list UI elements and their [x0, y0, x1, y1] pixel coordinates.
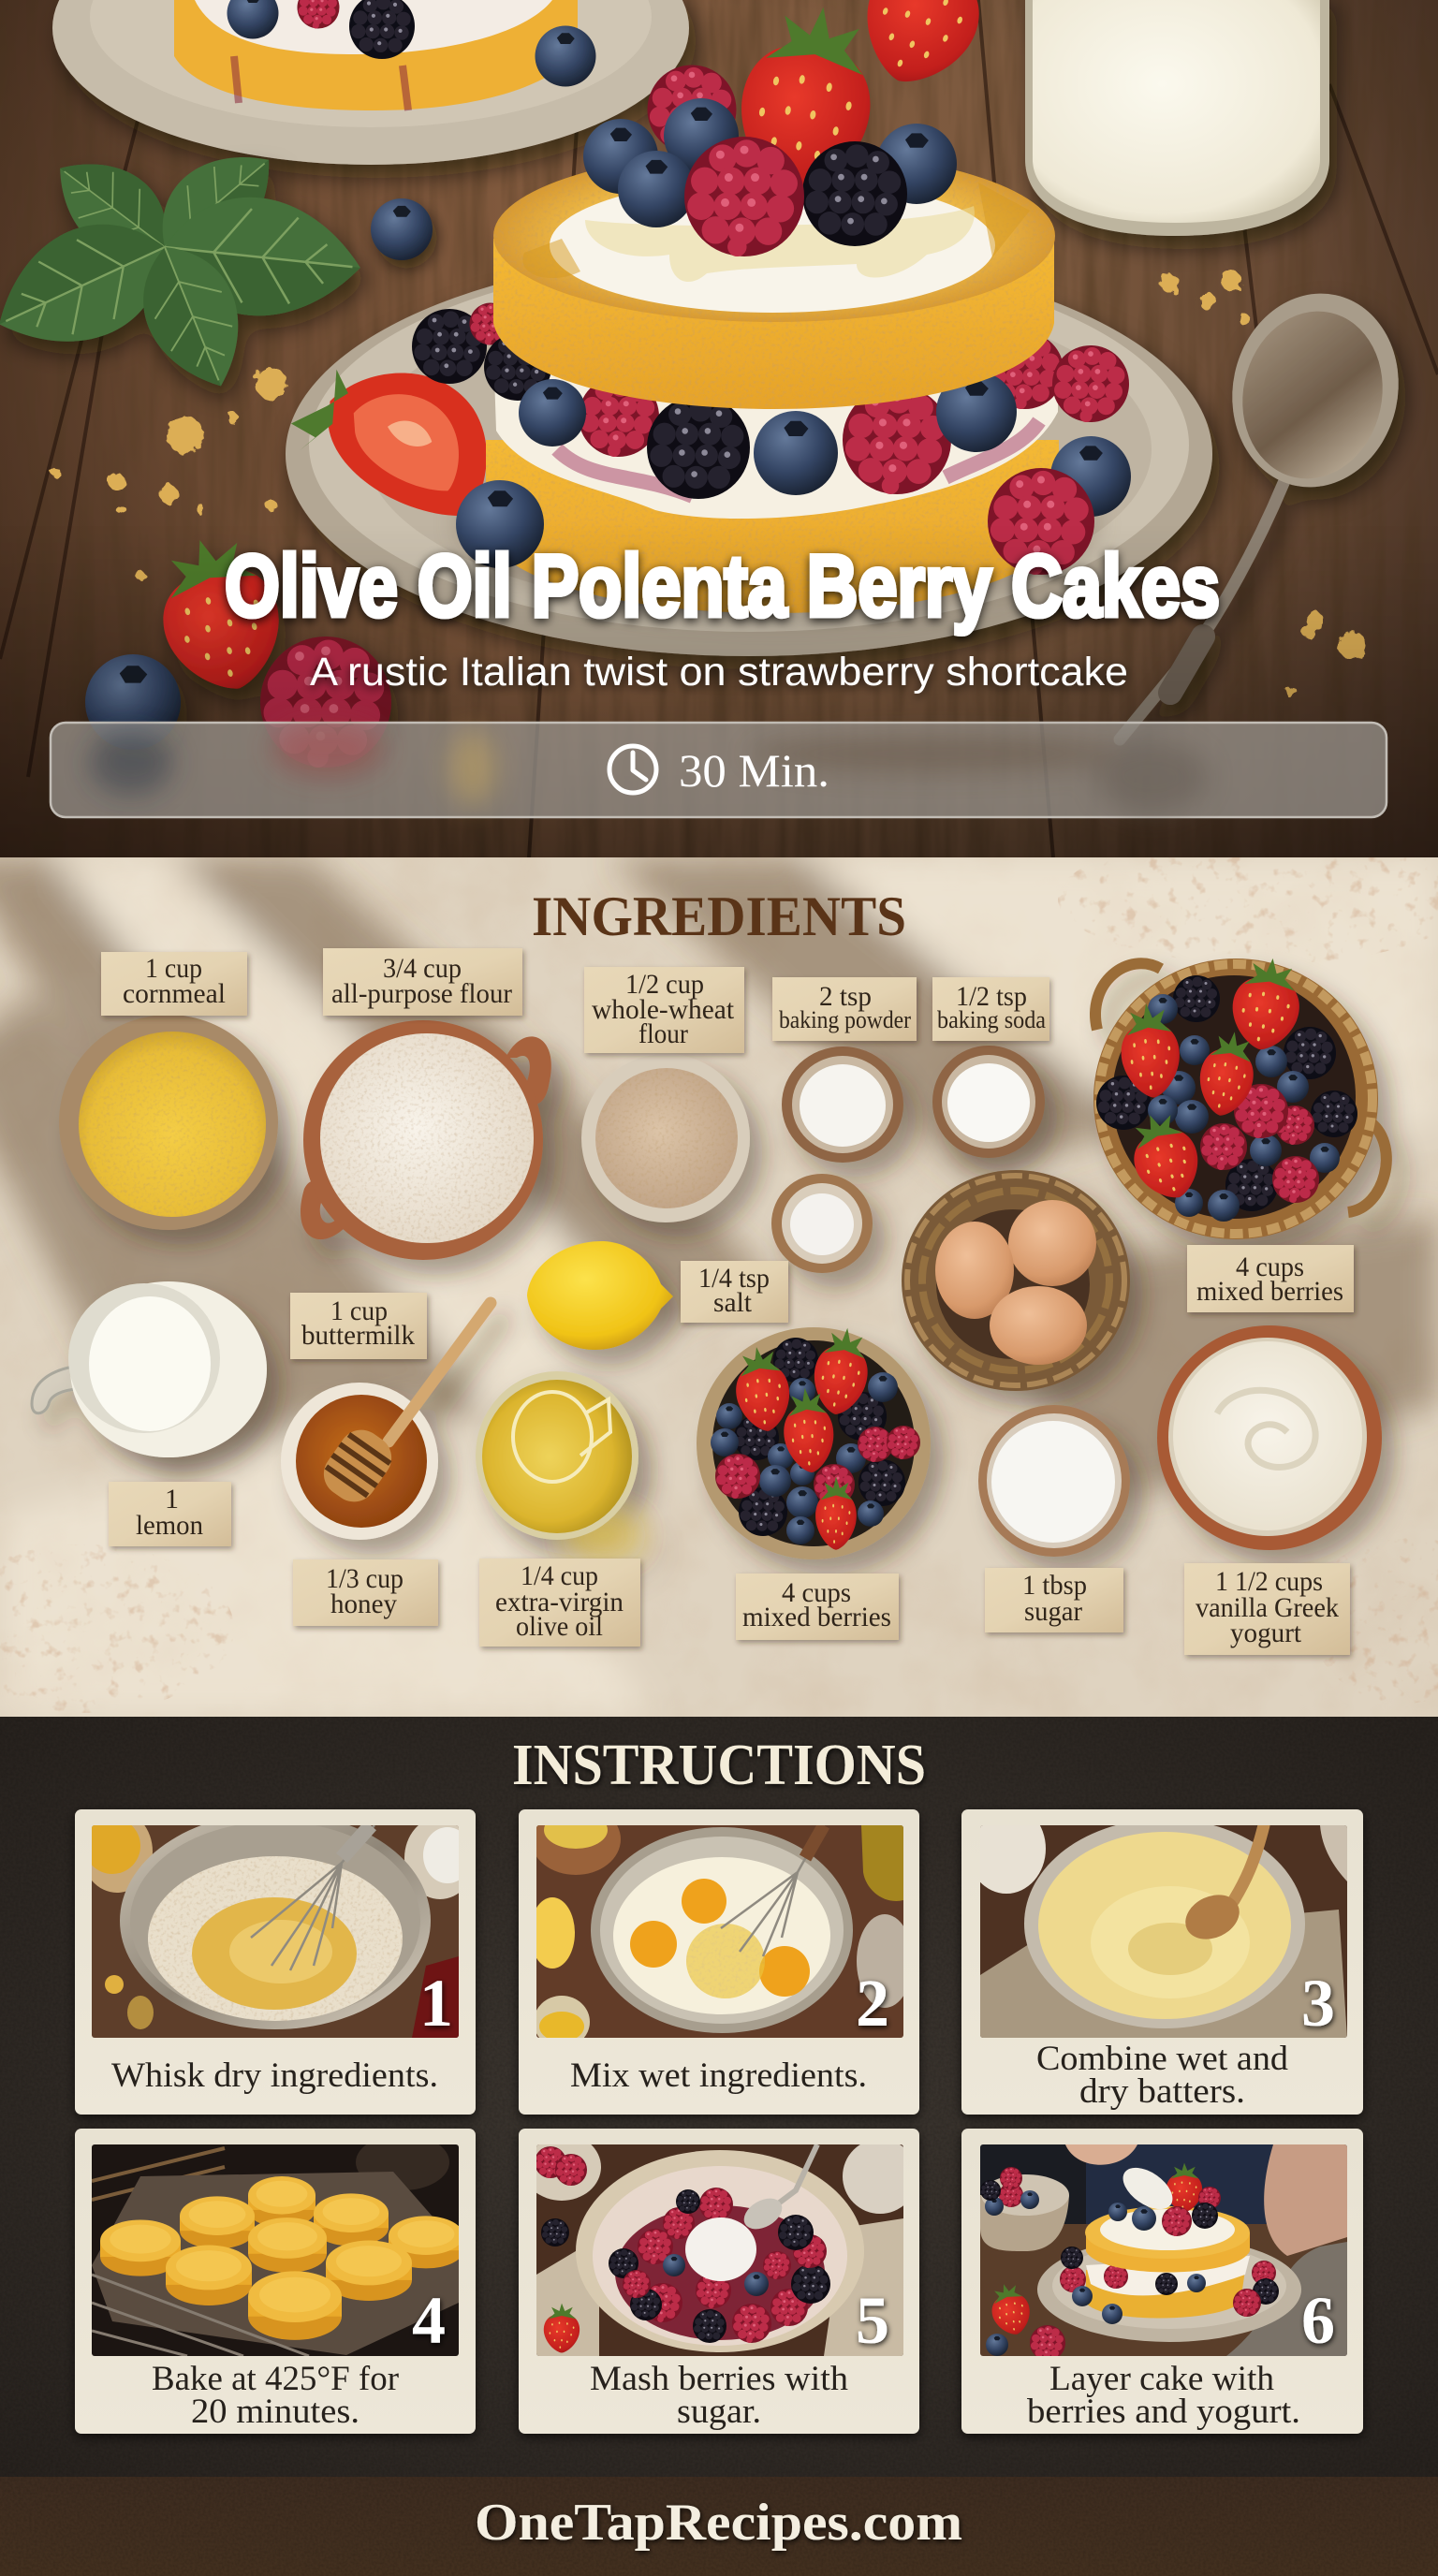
step 6 caption: berries and yogurt.: [1027, 2393, 1300, 2431]
label: baking powder: [772, 977, 917, 1041]
step card 4: [75, 2129, 476, 2434]
label: bowl mixed berries: 4 cups: [782, 1577, 851, 1608]
label: basket mixed berries: [1187, 1245, 1354, 1312]
step 5 photo: mashing berries with sugar: [522, 2133, 917, 2356]
step 1 photo: whisking dry ingredients: [81, 1810, 476, 2038]
wooden table background: [0, 0, 1438, 857]
website: OneTapRecipes.com: [475, 2494, 962, 2552]
label: all-purpose flour: 3/4 cup: [383, 953, 462, 984]
label: all-purpose flour: [323, 948, 522, 1016]
step number 2: 2: [856, 1966, 889, 2041]
step 4 caption: Bake at 425°F for: [152, 2360, 399, 2398]
label: whole-wheat flour: 1/2 cup: [625, 969, 704, 1000]
heading: instructions: INSTRUCTIONS: [512, 1734, 926, 1797]
strawberry leaves: [0, 128, 366, 402]
panel: footer: [0, 2477, 1438, 2576]
label: lemon: 1: [165, 1484, 179, 1515]
label: sugar: [985, 1568, 1123, 1632]
step 3 caption: Combine wet and: [1036, 2040, 1289, 2078]
main plate: [286, 252, 1212, 656]
step card 5: [519, 2129, 919, 2434]
label: bowl mixed berries: mixed berries: [742, 1602, 891, 1632]
nest with eggs: [902, 1170, 1130, 1391]
label: whole-wheat flour: whole-wheat: [592, 994, 735, 1025]
cook time: 30 Min.: [679, 744, 829, 797]
label: buttermilk: buttermilk: [301, 1320, 415, 1351]
step 5 caption: [590, 2360, 849, 2431]
label: sugar: sugar: [1024, 1596, 1082, 1627]
berries on table, lower left: [85, 525, 391, 768]
label: buttermilk: [290, 1293, 427, 1359]
label: extra-virgin olive oil: olive oil: [516, 1611, 603, 1642]
cream and berry juice layer: [494, 374, 1058, 519]
title: Olive Oil Polenta Berry Cakes: [225, 536, 1220, 635]
label: honey: [293, 1559, 438, 1626]
bowl: baking soda: [932, 1046, 1045, 1158]
label: baking powder: 2 tsp: [819, 981, 872, 1012]
label: salt: 1/4 tsp: [698, 1263, 770, 1294]
small plate with cake, top left: [52, 0, 689, 165]
lower cake layer: [486, 440, 1059, 613]
step 5 caption: Mash berries with: [590, 2360, 849, 2398]
label: honey: 1/3 cup: [326, 1563, 404, 1594]
label: lemon: [109, 1482, 231, 1546]
step card 6: [961, 2129, 1363, 2434]
step 6 caption: [1027, 2360, 1300, 2431]
label: whole-wheat flour: flour: [638, 1018, 688, 1049]
step 3 photo: combining batters: [967, 1804, 1347, 2038]
label: cornmeal: 1 cup: [145, 953, 202, 984]
label: vanilla Greek yogurt: 1 1/2 cups: [1215, 1566, 1323, 1597]
panel: ingredients section: [0, 833, 1438, 1717]
panel: hero photo section: [0, 0, 1438, 857]
loose blueberry near leaves: [371, 198, 433, 260]
label: vanilla Greek yogurt: yogurt: [1230, 1617, 1302, 1648]
berries on top of cake: [583, 0, 957, 256]
icon: clock: [609, 746, 656, 793]
yogurt and honey topping: [522, 178, 1030, 313]
label: honey: honey: [330, 1588, 397, 1619]
label: salt: salt: [713, 1287, 753, 1318]
label: whole-wheat flour: [584, 967, 744, 1053]
step number 4: 4: [412, 2283, 446, 2358]
step number 5: 5: [856, 2283, 889, 2358]
label: lemon: lemon: [136, 1510, 203, 1541]
step 2 photo: mixing wet ingredients: [530, 1804, 913, 2048]
label: baking soda: [932, 977, 1049, 1041]
plaster background with diagonal light: [0, 833, 1438, 1717]
step card 2: [519, 1804, 919, 2115]
subtitle: A rustic Italian twist on strawberry shortcake: [310, 650, 1128, 695]
bowl: flour with handles: [301, 1020, 551, 1260]
label: salt: [681, 1261, 788, 1323]
step 4 caption: 20 minutes.: [191, 2393, 360, 2431]
label: cornmeal: [101, 952, 247, 1016]
step 5 caption: sugar.: [677, 2393, 761, 2431]
step 6 caption: Layer cake with: [1049, 2360, 1274, 2398]
glass jar of buttermilk: [32, 1281, 267, 1457]
label: basket mixed berries: mixed berries: [1196, 1276, 1343, 1307]
step 4 caption: [152, 2360, 399, 2431]
step 6 photo: layering the cake: [980, 2144, 1347, 2361]
label: baking powder: baking powder: [779, 1006, 911, 1033]
label: bowl mixed berries: [736, 1573, 899, 1640]
step 2 caption: Mix wet ingredients.: [570, 2056, 867, 2095]
step number 1: 1: [419, 1966, 453, 2041]
dark slate background: [0, 1717, 1438, 2477]
step number 3: 3: [1301, 1966, 1335, 2041]
lemon: [527, 1241, 673, 1350]
bowl: cornmeal: [59, 1015, 278, 1230]
label: sugar: 1 tbsp: [1022, 1570, 1087, 1601]
label: cornmeal: cornmeal: [123, 978, 226, 1009]
bowl: whole-wheat flour: [581, 1054, 750, 1222]
crumbs scatter: [51, 271, 1367, 698]
label: vanilla Greek yogurt: vanilla Greek: [1196, 1592, 1339, 1623]
upper cake layer: [493, 150, 1055, 409]
label: baking soda: baking soda: [937, 1006, 1046, 1033]
step number 6: 6: [1301, 2283, 1335, 2358]
label: baking soda: 1/2 tsp: [956, 981, 1027, 1012]
bowl: sugar: [978, 1405, 1130, 1557]
bowl: baking powder: [782, 1046, 903, 1163]
label: all-purpose flour: all-purpose flour: [331, 978, 512, 1009]
label: extra-virgin olive oil: 1/4 cup: [521, 1560, 598, 1591]
label: extra-virgin olive oil: extra-virgin: [495, 1587, 624, 1617]
step card 1: [75, 1809, 476, 2115]
step 4 photo: cakes baking in oven: [92, 2134, 463, 2356]
panel: instructions section: [0, 1717, 1438, 2477]
bowl: olive oil: [476, 1371, 641, 1559]
step 3 caption: [1036, 2040, 1289, 2111]
step 3 caption: dry batters.: [1079, 2072, 1245, 2111]
bowl: salt: [771, 1174, 873, 1273]
heading: ingredients: INGREDIENTS: [532, 886, 906, 947]
label: basket mixed berries: 4 cups: [1236, 1251, 1304, 1282]
glass of milk: [1025, 0, 1329, 236]
label: vanilla Greek yogurt: [1184, 1563, 1350, 1655]
bowl: vanilla Greek yogurt: [1157, 1325, 1382, 1550]
berries between cake layers: [412, 303, 1131, 575]
step card 3: [961, 1804, 1363, 2115]
bowl: honey with dipper: [281, 1303, 491, 1540]
serving spoon: [1120, 278, 1416, 739]
halved strawberry on plate: [291, 370, 486, 516]
basket of mixed berries: [1093, 954, 1387, 1239]
label: extra-virgin olive oil: [479, 1559, 640, 1647]
bowl: mixed berries: [697, 1325, 931, 1559]
fade over lower hero: [0, 524, 1438, 857]
label: buttermilk: 1 cup: [330, 1295, 388, 1326]
time bar: [51, 721, 1387, 817]
strawberry behind cake, top: [867, 0, 979, 82]
step 1 caption: Whisk dry ingredients.: [111, 2056, 438, 2095]
